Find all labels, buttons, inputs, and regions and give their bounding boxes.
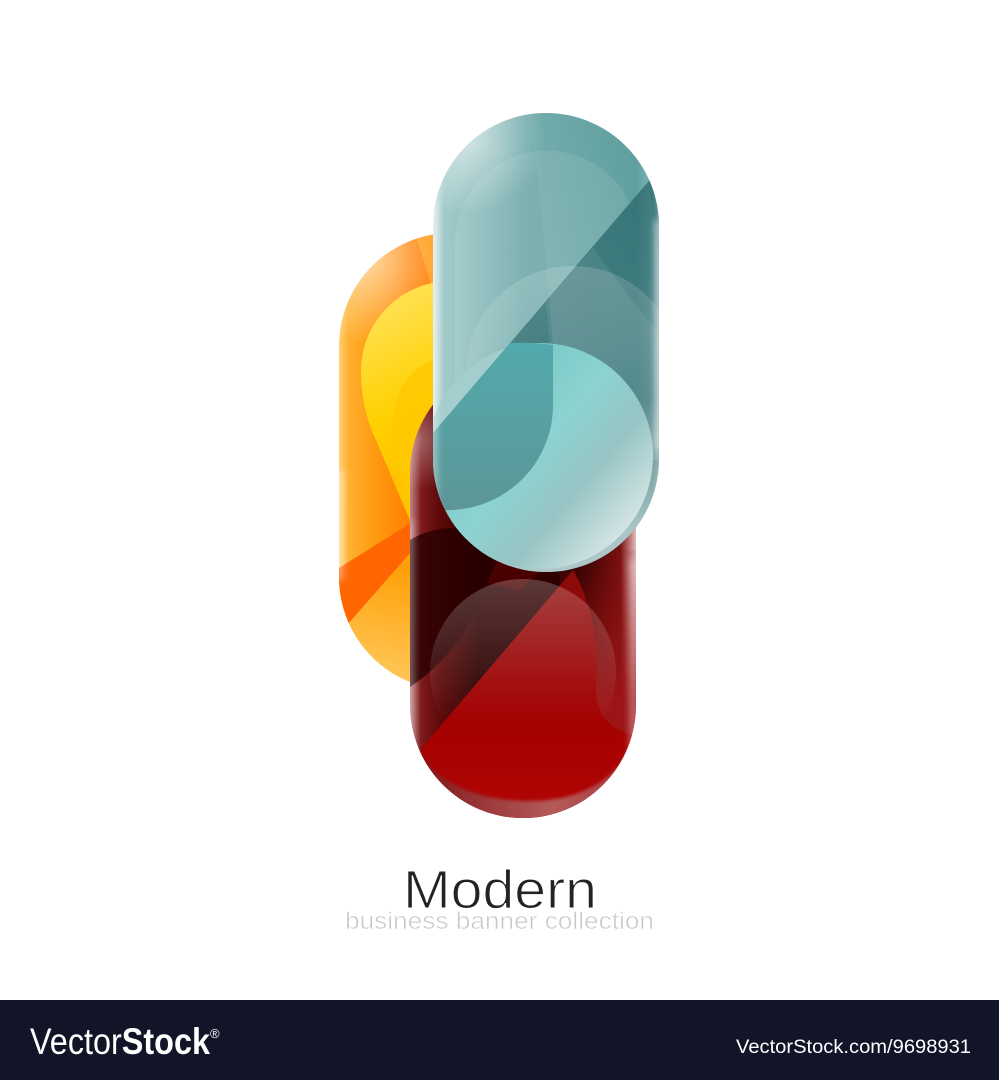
top inner circle: [455, 150, 630, 381]
red pill: [410, 404, 636, 818]
second circle: [470, 266, 659, 386]
footer bar: [0, 1000, 999, 1080]
subheading: business banner collection: [345, 908, 654, 935]
dark area below diagonal: [433, 170, 659, 572]
lighter patch under curve: [546, 247, 660, 460]
footer image id: VectorStock.com/9698931: [736, 1037, 971, 1058]
heading: Modern: Modern: [403, 860, 597, 920]
teal body: [433, 113, 659, 572]
light wedge above diagonal: [433, 348, 505, 432]
teal pill: [433, 113, 659, 572]
orange pill: [339, 234, 433, 682]
footer logo: VectorStock: [30, 1021, 210, 1062]
vertical band: [546, 186, 659, 460]
bright main circle: [427, 343, 653, 569]
registered mark: ®: [210, 1026, 220, 1041]
darker lower left shape: [433, 343, 553, 510]
lower ring glow: [433, 400, 659, 572]
